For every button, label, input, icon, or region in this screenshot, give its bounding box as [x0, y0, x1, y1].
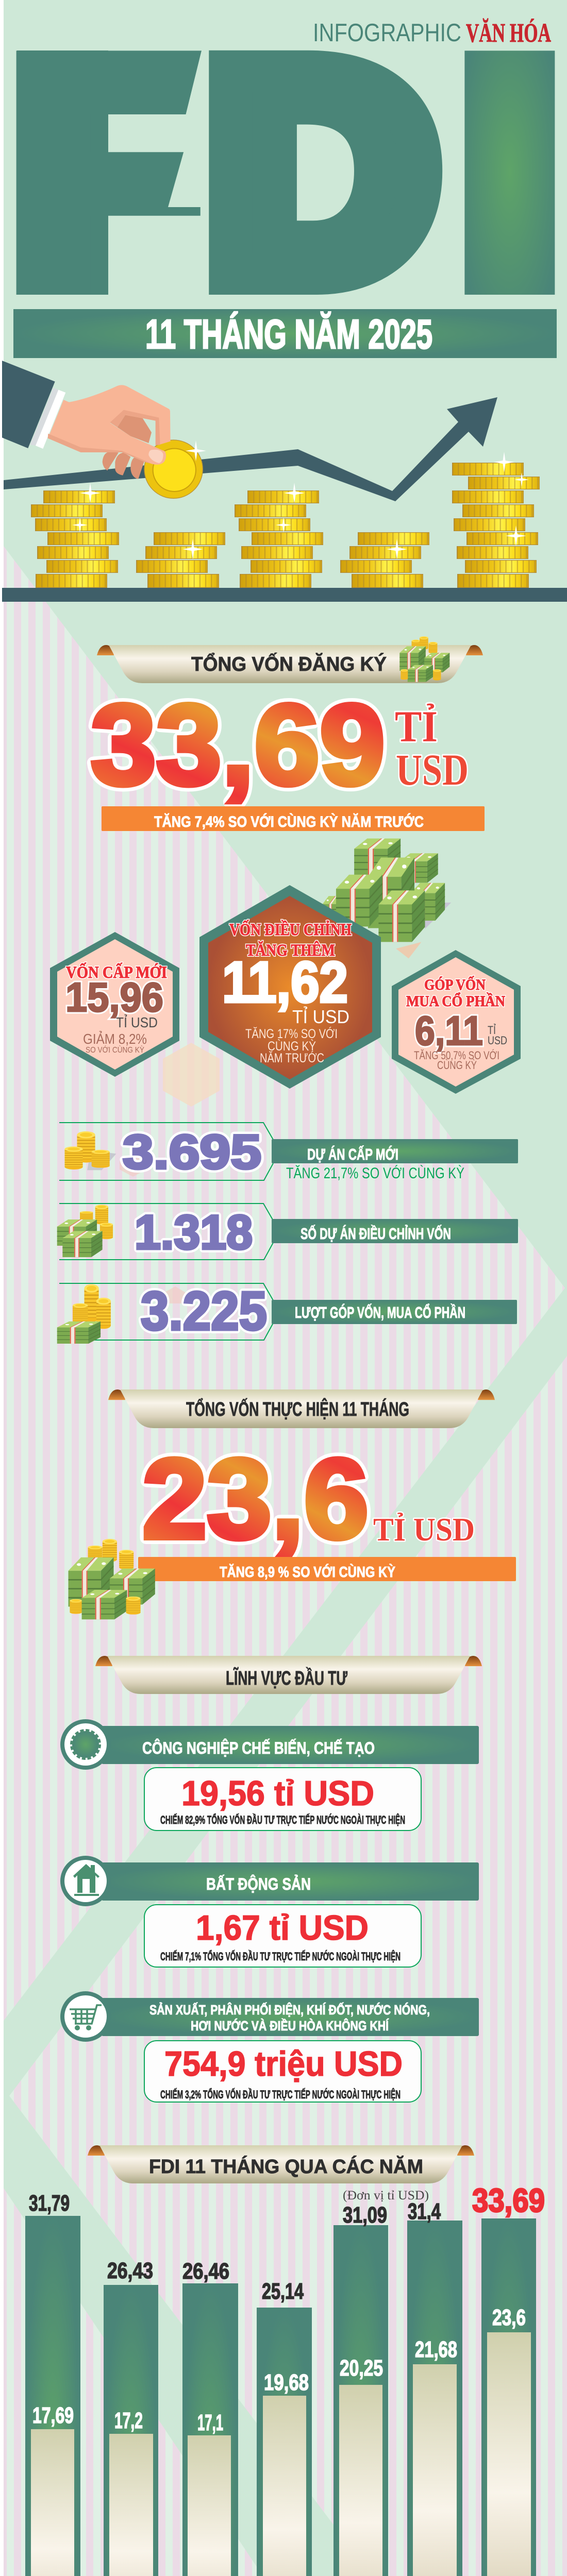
sector: công nghiệp chế biến, chế tạo — [60, 1719, 479, 1831]
hexagon: góp vốn mua cổ phần: GÓP VỐN — [424, 976, 486, 993]
sector: sản xuất, phân phối điện: HƠI NƯỚC VÀ ĐIỀU HÒA KHÔNG KHÍ — [191, 2018, 389, 2033]
rising arrow chart — [4, 397, 497, 501]
icon: house badge — [60, 1856, 111, 1906]
illustration: hand holding coin — [2, 361, 203, 498]
values: implemented capital: 23,6 — [492, 2305, 526, 2330]
stat row: 1.318 số dự án điều chỉnh vốn: 1.318 — [135, 1205, 253, 1259]
icon: gear badge — [60, 1719, 111, 1770]
heading ribbon: tổng vốn thực hiện — [108, 1389, 495, 1428]
hexagon: vốn điều chỉnh tăng thêm: TĂNG THÊM — [246, 940, 335, 960]
icon: cart badge — [60, 1991, 111, 2042]
stat row: 3.695 dự án cấp mới — [59, 1123, 518, 1182]
hexagon: góp vốn mua cổ phần: GÓP VỐN — [424, 976, 486, 993]
callout: tăng 8,9%: TĂNG 8,9 % SO VỚI CÙNG KỲ — [220, 1563, 395, 1581]
unit note: (Đơn vị tỉ USD) — [343, 2189, 429, 2202]
subtitle band: 11 tháng năm 2025: 11 THÁNG NĂM 2025 — [145, 311, 432, 357]
hexagon: vốn cấp mới — [50, 932, 179, 1077]
key number: 33,69 tỉ USD: 33,69 — [91, 681, 385, 809]
hexagon: góp vốn mua cổ phần: MUA CỔ PHẦN — [406, 992, 505, 1010]
stat row: 3.695 dự án cấp mới: DỰ ÁN CẤP MỚI — [307, 1145, 398, 1163]
key number: 23,6 tỉ USD: 23,6 — [142, 1435, 369, 1562]
stat row: 3.225 lượt góp vốn, mua cổ phần: 3.225 — [141, 1281, 267, 1342]
hexagon: vốn điều chỉnh tăng thêm: TĂNG 17% SO VỚI — [245, 1026, 338, 1041]
hexagon: vốn điều chỉnh tăng thêm: CÙNG KỲ — [268, 1039, 316, 1054]
hexagon: vốn điều chỉnh tăng thêm: 11,62 — [222, 950, 348, 1014]
hexagon: vốn cấp mới: 15,96 — [65, 974, 163, 1020]
sector: bất động sản: CHIẾM 7,1% TỔNG VỐN ĐẦU TƯ TRỰC TIẾP NƯỚC NGOÀI THỰC HIỆN — [160, 1950, 401, 1963]
icon: cash and coins — [68, 1539, 155, 1619]
key number: 23,6 tỉ USD — [142, 1435, 475, 1562]
stat row: 3.225 lượt góp vốn, mua cổ phần — [57, 1281, 517, 1344]
values: implemented capital: 17,1 — [197, 2410, 223, 2435]
key number: 23,6 tỉ USD: TỈ USD — [373, 1511, 475, 1548]
stat row: 1.318 số dự án điều chỉnh vốn: 1.318 — [135, 1205, 253, 1259]
bars: implemented capital — [31, 2332, 531, 2576]
value: 2025 highlight: 33,69 — [472, 2182, 545, 2219]
title: FDI: F — [10, 0, 201, 347]
hexagon: vốn cấp mới: VỐN CẤP MỚI — [66, 962, 167, 982]
sector: công nghiệp chế biến, chế tạo: CHIẾM 82,9% TỔNG VỐN ĐẦU TƯ TRỰC TIẾP NƯỚC NGOÀI THỰC HIỆN — [160, 1813, 405, 1826]
values: registered capital: 31,4 — [408, 2199, 441, 2224]
stat row: 3.695 dự án cấp mới: 3.695 — [123, 1125, 261, 1179]
hexagon: góp vốn mua cổ phần: TỈ — [488, 1024, 496, 1037]
values: implemented capital: 21,68 — [415, 2337, 457, 2362]
masthead: Infographic Văn Hóa: INFOGRAPHIC — [313, 19, 461, 47]
icon: cash and coins on ribbon — [399, 636, 449, 682]
callout: tăng 7,4%: TĂNG 7,4% SO VỚI CÙNG KỲ NĂM TRƯỚC — [154, 813, 424, 831]
title: FDI: D — [210, 7, 434, 337]
hexagon: vốn điều chỉnh tăng thêm: TỈ USD — [292, 1006, 349, 1027]
sector: công nghiệp chế biến, chế tạo: CÔNG NGHIỆP CHẾ BIẾN, CHẾ TẠO — [142, 1739, 375, 1757]
stat row: 1.318 số dự án điều chỉnh vốn — [57, 1204, 518, 1260]
values: registered capital: 31,09 — [343, 2202, 387, 2228]
values: implemented capital: 17,69 — [32, 2403, 74, 2428]
hexagon: góp vốn mua cổ phần — [392, 950, 521, 1094]
sector: công nghiệp chế biến, chế tạo: 19,56 tỉ USD — [181, 1774, 374, 1813]
stat row: 3.225 lượt góp vốn, mua cổ phần: 3.225 — [141, 1281, 267, 1342]
hexagon: góp vốn mua cổ phần: 6,11 — [415, 1008, 483, 1054]
illustration: coin stacks — [31, 463, 540, 588]
values: implemented capital: 20,25 — [340, 2355, 383, 2381]
sector: sản xuất, phân phối điện: 754,9 triệu USD — [164, 2044, 403, 2083]
key number: 23,6 tỉ USD: 23,6 — [142, 1435, 369, 1562]
bars: registered capital — [25, 2216, 536, 2576]
stat row: 3.695 dự án cấp mới: 3.695 — [123, 1125, 261, 1179]
hexagon: góp vốn mua cổ phần: 6,11 — [415, 1008, 483, 1054]
hexagon: vốn cấp mới: SO VỚI CÙNG KỲ — [86, 1045, 144, 1055]
key number: 33,69 tỉ USD: 33,69 — [91, 681, 385, 809]
hexagon: vốn điều chỉnh tăng thêm: TĂNG THÊM — [246, 940, 335, 960]
values: implemented capital: 17,2 — [114, 2408, 143, 2433]
icon: pile of cash — [323, 838, 451, 958]
sector: sản xuất, phân phối điện: CHIẾM 3,2% TỔNG VỐN ĐẦU TƯ TRỰC TIẾP NƯỚC NGOÀI THỰC HIỆN — [160, 2088, 401, 2101]
base bar — [2, 588, 567, 602]
callout: tăng 7,4% — [102, 806, 485, 831]
heading ribbon: FDI 11 tháng qua các năm — [88, 2145, 474, 2183]
stat row: 3.695 dự án cấp mới: TĂNG 21,7% SO VỚI CÙNG KỲ — [286, 1165, 464, 1182]
heading ribbon: tổng vốn đăng ký: TỔNG VỐN ĐĂNG KÝ — [191, 652, 387, 675]
heading ribbon: lĩnh vực đầu tư — [95, 1656, 482, 1694]
hexagon: vốn điều chỉnh tăng thêm: VỐN ĐIỀU CHỈNH — [229, 919, 352, 939]
hexagon: góp vốn mua cổ phần: USD — [488, 1034, 507, 1047]
title: FDI — [10, 0, 563, 347]
hexagon: vốn điều chỉnh tăng thêm: NĂM TRƯỚC — [260, 1050, 324, 1065]
title: FDI: I — [457, 0, 563, 347]
hexagon: vốn cấp mới: 15,96 — [65, 974, 163, 1020]
sector: sản xuất, phân phối điện — [60, 1991, 479, 2102]
heading ribbon: tổng vốn thực hiện: TỔNG VỐN THỰC HIỆN 11 THÁNG — [186, 1397, 409, 1420]
key number: 33,69 tỉ USD: USD — [396, 745, 469, 794]
sector: bất động sản: 1,67 tỉ USD — [196, 1908, 369, 1947]
values: implemented capital: 19,68 — [264, 2370, 309, 2395]
stat row: 3.225 lượt góp vốn, mua cổ phần: LƯỢT GÓP VỐN, MUA CỔ PHẦN — [295, 1303, 465, 1321]
sector: sản xuất, phân phối điện: SẢN XUẤT, PHÂN PHỐI ĐIỆN, KHÍ ĐỐT, NƯỚC NÓNG, — [149, 2002, 430, 2018]
hexagon: góp vốn mua cổ phần: TĂNG 50,7% SO VỚI — [414, 1049, 499, 1062]
values: implemented capital — [32, 2305, 526, 2435]
callout: tăng 8,9% — [138, 1557, 516, 1581]
masthead: Infographic Văn Hóa — [313, 18, 551, 48]
hexagon: vốn cấp mới: TỈ USD — [116, 1014, 158, 1030]
sector: bất động sản: BẤT ĐỘNG SẢN — [206, 1875, 311, 1893]
values: registered capital: 25,14 — [262, 2279, 304, 2304]
hexagon: vốn cấp mới: VỐN CẤP MỚI — [66, 962, 167, 982]
heading ribbon: FDI 11 tháng qua các năm: FDI 11 THÁNG QUA CÁC NĂM — [149, 2155, 423, 2178]
values: registered capital: 26,43 — [107, 2258, 153, 2283]
values: registered capital: 26,46 — [182, 2259, 229, 2284]
values: registered capital: 31,79 — [29, 2191, 70, 2216]
heading ribbon: tổng vốn đăng ký — [97, 645, 483, 683]
hexagon: góp vốn mua cổ phần: MUA CỔ PHẦN — [406, 992, 505, 1010]
hexagon: vốn điều chỉnh tăng thêm — [199, 885, 381, 1089]
stat row: 1.318 số dự án điều chỉnh vốn: SỐ DỰ ÁN ĐIỀU CHỈNH VỐN — [301, 1224, 451, 1243]
hexagon: vốn cấp mới: GIẢM 8,2% — [83, 1030, 147, 1047]
heading ribbon: lĩnh vực đầu tư: LĨNH VỰC ĐẦU TƯ — [226, 1667, 347, 1689]
icons: sparkles — [72, 440, 529, 560]
bar chart: FDI by year — [25, 2182, 545, 2576]
key number: 33,69 tỉ USD: TỈ — [395, 702, 438, 751]
sector: bất động sản — [60, 1856, 479, 1967]
hexagon: góp vốn mua cổ phần: CÙNG KỲ — [437, 1059, 477, 1072]
hexagon: vốn điều chỉnh tăng thêm: VỐN ĐIỀU CHỈNH — [229, 919, 352, 939]
values: registered capital — [29, 2191, 441, 2304]
